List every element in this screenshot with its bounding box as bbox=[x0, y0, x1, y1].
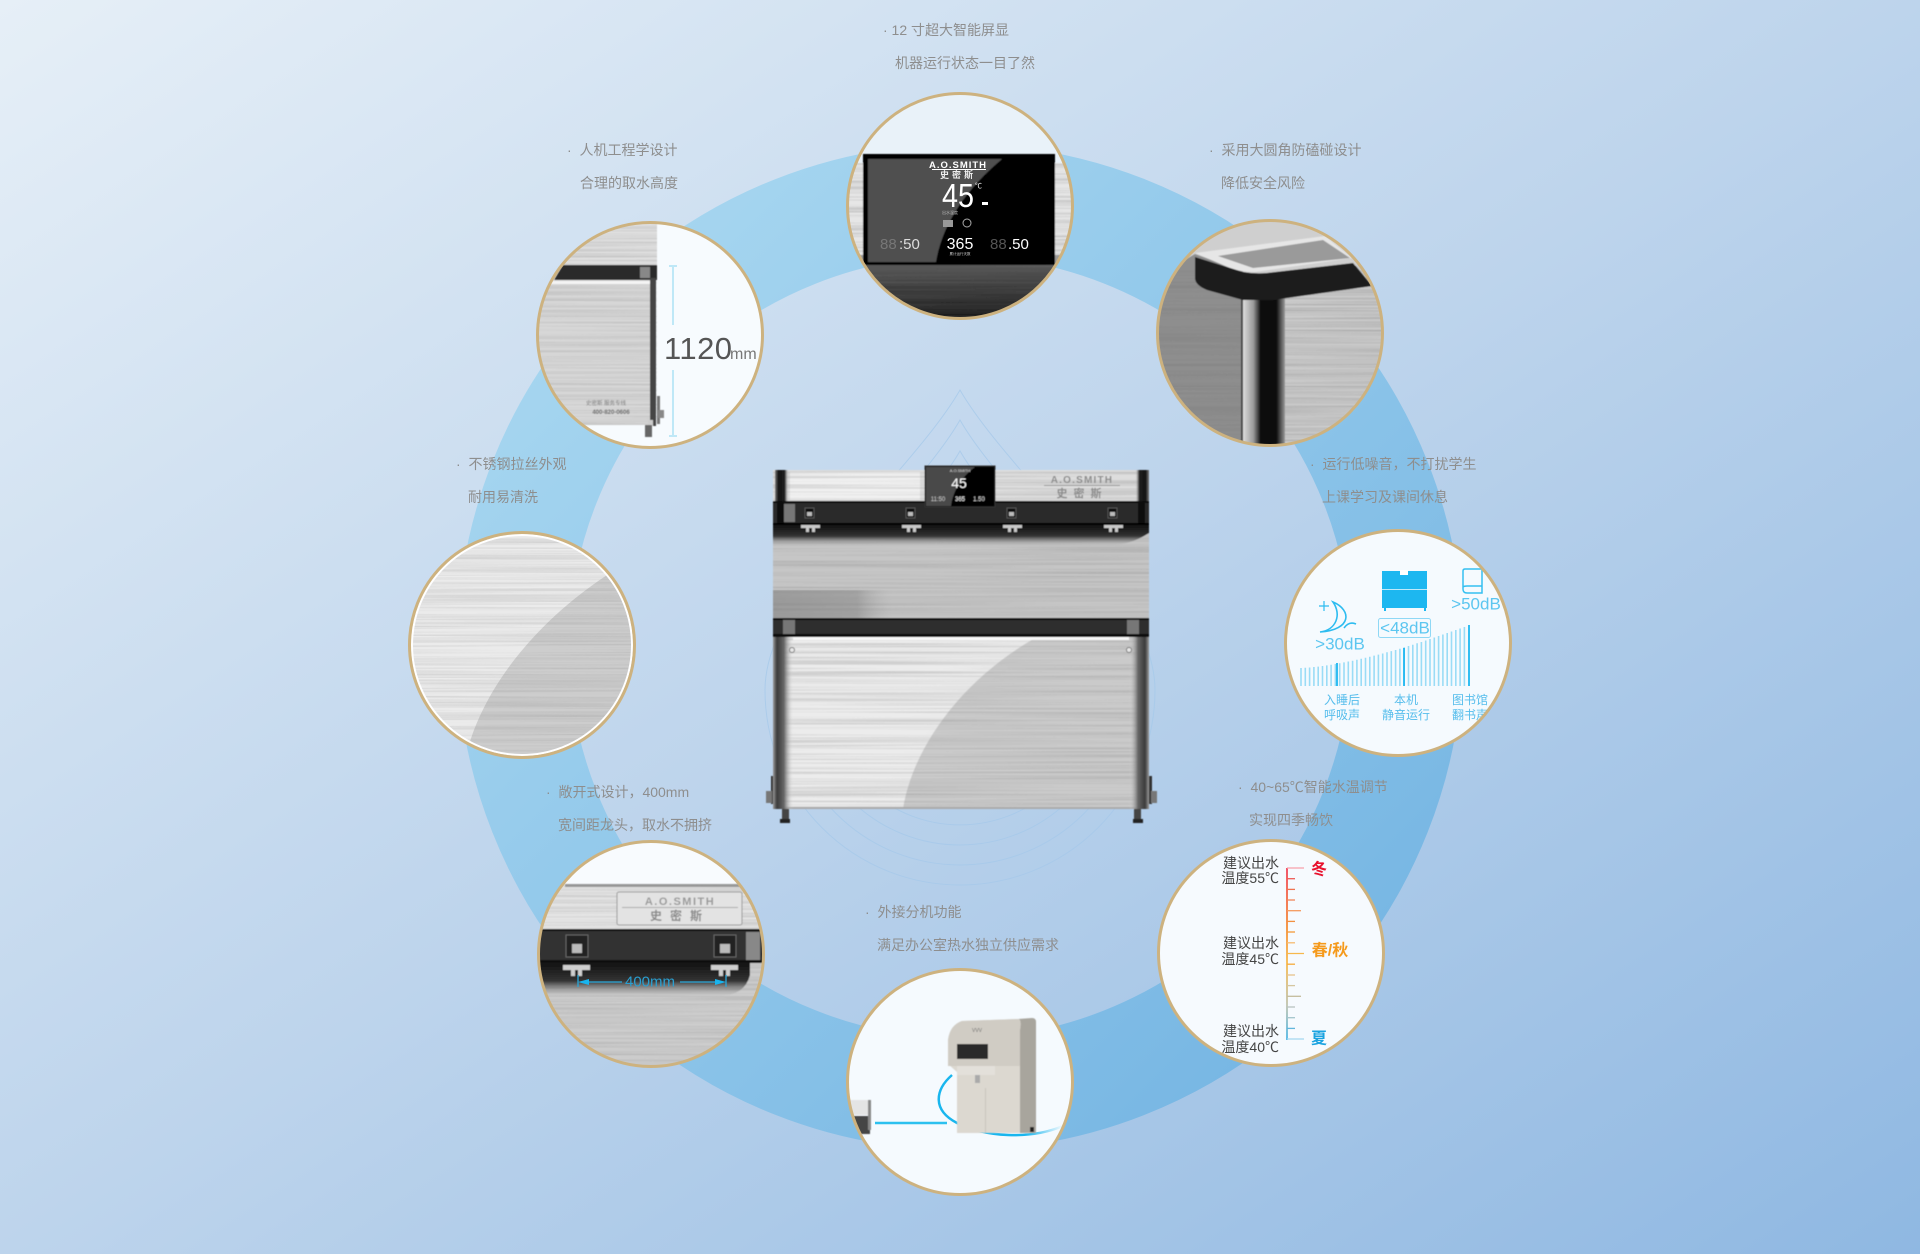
height value bbox=[666, 338, 756, 360]
enlarged display: .50 bbox=[1008, 236, 1029, 253]
caption: stainless steel: 耐用易清洗 bbox=[468, 489, 538, 505]
product side columns bbox=[773, 470, 1149, 809]
height value: mm bbox=[730, 346, 757, 363]
panel: wide tap spacing circle bbox=[535, 841, 770, 1070]
product display: 11:50 bbox=[931, 497, 946, 503]
caption: ergonomics: · 人机工程学设计 bbox=[567, 142, 677, 158]
product upper panel bbox=[773, 470, 1149, 502]
caption: rounded corner: · 采用大圆角防磕碰设计 bbox=[1209, 142, 1361, 158]
temperature labels: 温度55℃ bbox=[1221, 870, 1279, 886]
bar labels: 翻书声 bbox=[1452, 708, 1488, 722]
enlarged display: 365 bbox=[947, 236, 973, 253]
logo plate bbox=[617, 892, 742, 925]
caption: ergonomics: 合理的取水高度 bbox=[580, 175, 678, 191]
caption: ergonomics bbox=[567, 142, 678, 191]
caption: open design bbox=[546, 784, 712, 833]
dimension arrow bbox=[577, 975, 727, 987]
caption: temperature bbox=[1238, 779, 1388, 828]
temperature scale bbox=[1286, 868, 1304, 1040]
connecting line bbox=[875, 1122, 947, 1124]
enlarged display bbox=[845, 154, 1075, 325]
caption: temperature: · 40~65℃智能水温调节 bbox=[1238, 779, 1388, 795]
temperature labels: 温度40℃ bbox=[1221, 1039, 1279, 1055]
icon: dispenser bbox=[1382, 570, 1427, 611]
product feet and side pipes bbox=[766, 776, 1157, 823]
external unit: VVV bbox=[972, 1028, 983, 1034]
enlarged display: 史密斯 bbox=[940, 169, 976, 180]
caption: low noise bbox=[1310, 456, 1476, 505]
caption: screen: 机器运行状态一目了然 bbox=[895, 55, 1035, 71]
height value: 1120 bbox=[664, 331, 732, 366]
enlarged display: 88 bbox=[990, 236, 1007, 253]
enlarged display: A.O.SMITH bbox=[929, 160, 987, 171]
side view: 史密斯 服务专线 bbox=[586, 399, 627, 407]
enlarged taps bbox=[535, 884, 770, 1070]
bar labels: 呼吸声 bbox=[1324, 708, 1360, 722]
temperature labels: 建议出水 bbox=[1223, 935, 1279, 951]
bar labels: 图书馆 bbox=[1452, 692, 1488, 707]
product lower band bbox=[773, 618, 1149, 640]
product display: 365 bbox=[955, 497, 966, 503]
product middle panel bbox=[773, 524, 1149, 619]
value: 30 dB: >30dB bbox=[1315, 634, 1365, 654]
caption: open design: 宽间距龙头，取水不拥挤 bbox=[558, 817, 712, 833]
water drop watermark bbox=[765, 390, 1155, 885]
enlarged display: 出水温度 bbox=[942, 209, 958, 215]
faucets bbox=[563, 965, 738, 976]
panel: large screen circle bbox=[845, 93, 1075, 325]
caption: stainless steel bbox=[456, 456, 566, 505]
caption: low noise: 上课学习及课间休息 bbox=[1322, 489, 1448, 505]
product display: 1.50 bbox=[973, 497, 985, 503]
logo plate: A.O.SMITH bbox=[645, 896, 715, 908]
sound bars bbox=[1301, 625, 1469, 686]
panel: brushed steel circle bbox=[405, 530, 640, 760]
enlarged display: :50 bbox=[899, 236, 920, 253]
dimension arrow: 400mm bbox=[625, 974, 675, 990]
season: winter: 冬 bbox=[1311, 860, 1327, 878]
caption: rounded corner: 降低安全风险 bbox=[1221, 175, 1305, 191]
bar labels: 入睡后 bbox=[1324, 693, 1360, 707]
panel: water temperature circle bbox=[1158, 840, 1384, 1066]
product display bbox=[925, 466, 995, 507]
temperature labels: 温度45℃ bbox=[1221, 951, 1279, 967]
caption: external unit bbox=[865, 904, 1059, 953]
product logo: 史密斯 bbox=[1056, 486, 1108, 500]
icon: book bbox=[1463, 569, 1482, 593]
tap switches bbox=[805, 508, 1117, 518]
product lower panel bbox=[773, 636, 1149, 809]
product shadow bbox=[773, 525, 1149, 545]
switches bbox=[566, 935, 736, 957]
caption: external unit: · 外接分机功能 bbox=[865, 904, 961, 920]
ring bbox=[513, 200, 1407, 1094]
bar labels bbox=[1324, 694, 1488, 720]
noise level graphic bbox=[1301, 569, 1501, 722]
steel surface bbox=[413, 538, 633, 756]
temperature labels bbox=[1221, 855, 1279, 1055]
enlarged display: 88 bbox=[880, 236, 897, 253]
value: 48 dB box: <48dB bbox=[1380, 618, 1430, 638]
faucets bbox=[801, 525, 1123, 532]
caption: low noise: · 运行低噪音，不打扰学生 bbox=[1310, 456, 1476, 472]
product tap band bbox=[773, 501, 1149, 525]
panel: low noise circle bbox=[1285, 530, 1511, 756]
dispenser illustration bbox=[850, 1018, 1063, 1135]
panel: ergonomic height circle bbox=[535, 220, 763, 448]
corner metal bbox=[1159, 236, 1381, 444]
enlarged display: 45 bbox=[942, 177, 974, 214]
product logo: A.O.SMITH bbox=[1051, 475, 1113, 486]
product display: 45 bbox=[951, 475, 967, 491]
caption: external unit: 满足办公室热水独立供应需求 bbox=[877, 937, 1059, 953]
main unit fragment bbox=[850, 1100, 871, 1134]
caption: screen: · 12 寸超大智能屏显 bbox=[883, 22, 1009, 38]
panel: rounded corner circle bbox=[1150, 215, 1390, 455]
caption: temperature: 实现四季畅饮 bbox=[1249, 812, 1333, 828]
icon: moon and star bbox=[1319, 601, 1356, 632]
bar labels: 静音运行 bbox=[1382, 707, 1430, 722]
temperature labels: 建议出水 bbox=[1223, 855, 1279, 871]
season: summer: 夏 bbox=[1311, 1030, 1327, 1048]
temperature labels: 建议出水 bbox=[1223, 1023, 1279, 1039]
side view bbox=[535, 220, 757, 437]
logo plate: 史密斯 bbox=[650, 908, 710, 923]
central product: water dispenser bbox=[766, 466, 1157, 823]
season: spring and autumn: 春/秋 bbox=[1312, 940, 1348, 960]
caption: stainless steel: · 不锈钢拉丝外观 bbox=[456, 456, 566, 472]
caption: rounded corner bbox=[1209, 142, 1361, 191]
product display: A.O.SMITH bbox=[950, 468, 970, 473]
caption: open design: · 敞开式设计，400mm bbox=[546, 784, 689, 800]
external unit bbox=[948, 1018, 1036, 1133]
product screws bbox=[790, 648, 1132, 652]
product logo bbox=[1044, 475, 1120, 500]
enlarged display: 累计运行天数 bbox=[950, 251, 971, 256]
panel: external dispenser circle bbox=[847, 969, 1073, 1195]
caption: screen bbox=[883, 22, 1035, 71]
height ruler bbox=[669, 266, 677, 436]
side view: 400-820-0606 bbox=[592, 410, 630, 416]
value: 50 dB: >50dB bbox=[1451, 594, 1501, 614]
enlarged display: ℃ bbox=[975, 182, 982, 190]
bar labels: 本机 bbox=[1394, 693, 1418, 707]
